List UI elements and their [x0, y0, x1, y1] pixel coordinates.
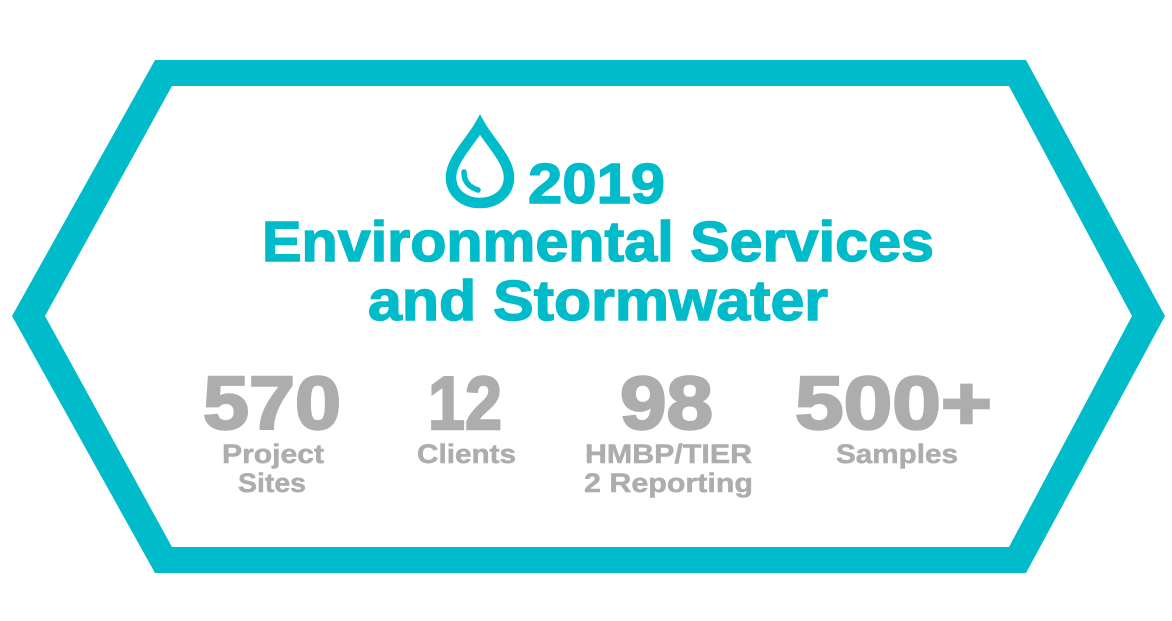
stat: clients — [417, 361, 516, 469]
title: 2019 — [528, 152, 665, 216]
stat: samples: 500+ — [795, 361, 992, 445]
stat: clients: Clients — [417, 439, 516, 469]
stat: project sites: Sites — [238, 468, 306, 498]
title — [262, 152, 934, 333]
icon: water drop — [451, 125, 509, 203]
title: Environmental Services — [262, 210, 934, 274]
stat: HMBP/TIER 2 reporting: 2 Reporting — [584, 468, 753, 498]
stat: HMBP/TIER 2 reporting: 98 — [620, 361, 713, 445]
stat: project sites: 570 — [203, 361, 341, 445]
title: and Stormwater — [368, 269, 828, 333]
stat: HMBP/TIER 2 reporting — [584, 361, 753, 498]
stat: samples: Samples — [836, 439, 958, 469]
stat: samples — [795, 361, 992, 469]
stat: clients: 12 — [428, 361, 502, 445]
stat: project sites: Project — [222, 439, 324, 469]
stat: project sites — [203, 361, 341, 498]
stat: HMBP/TIER 2 reporting: HMBP/TIER — [585, 439, 752, 469]
